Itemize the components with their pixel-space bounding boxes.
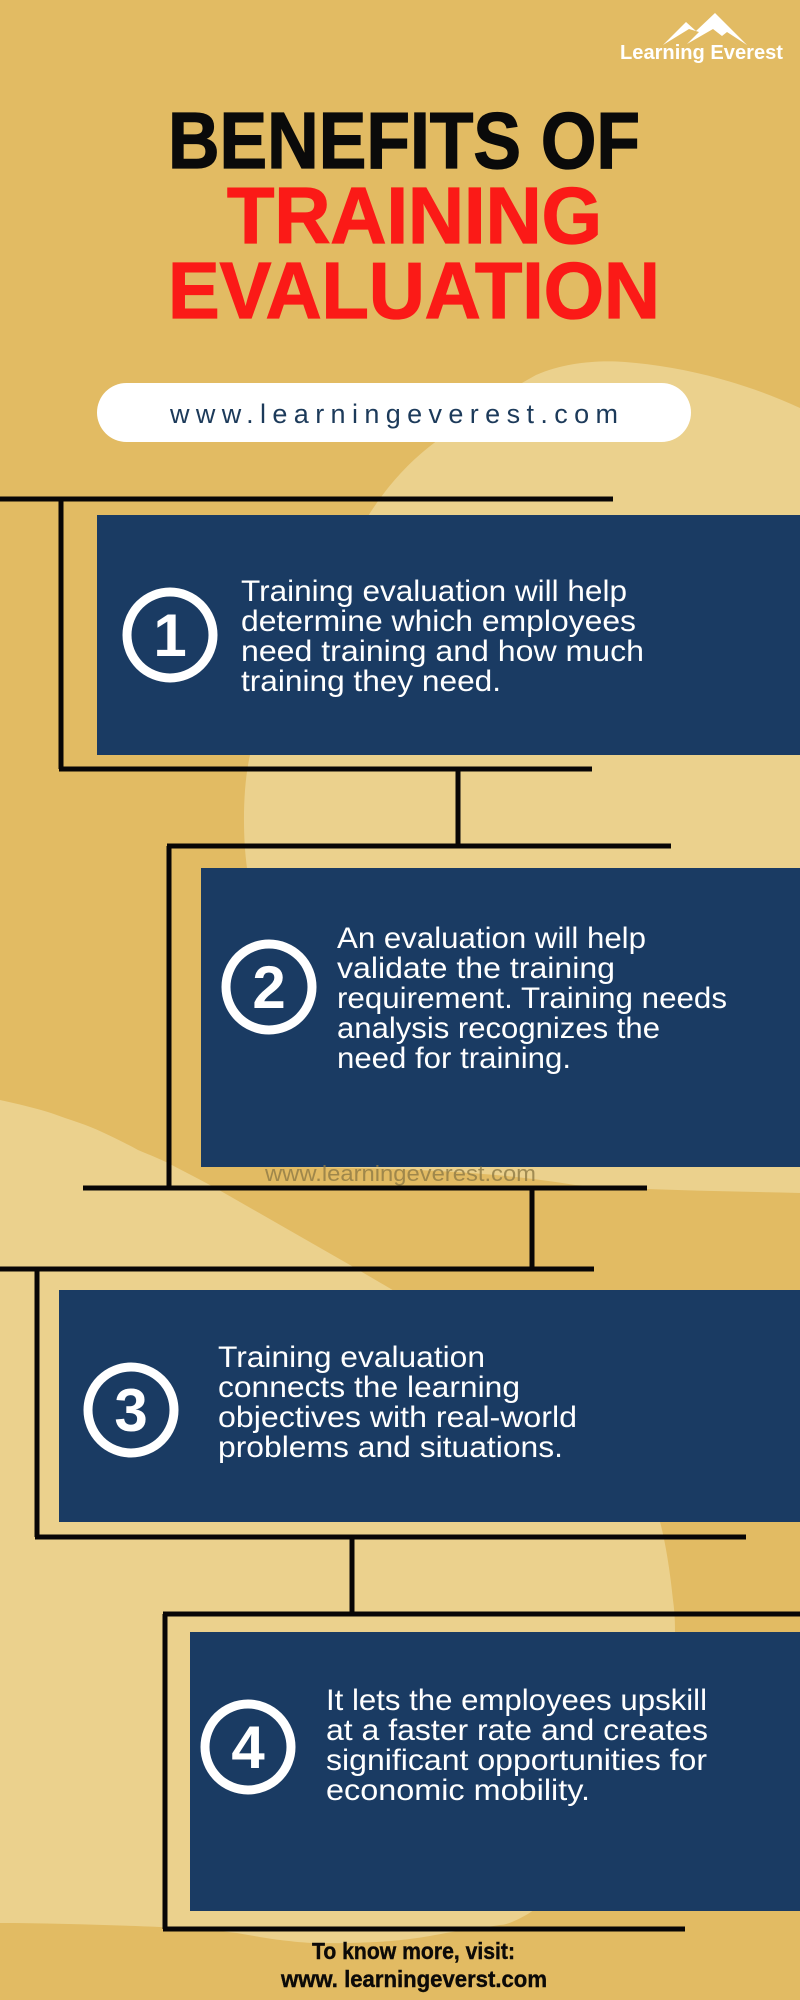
- watermark text: www.learningeverest.com: [264, 1161, 536, 1186]
- number badge 2: 2: [252, 954, 286, 1021]
- title line 3: EVALUATION: [168, 246, 660, 335]
- title line 1: BENEFITS OF: [168, 96, 640, 185]
- panel 2 text: requirement. Training needs: [337, 982, 727, 1015]
- panel 1 text: [241, 575, 644, 698]
- panel 4 text: significant opportunities for: [326, 1744, 707, 1777]
- panel 4 text: It lets the employees upskill: [326, 1684, 707, 1717]
- panel 2 text: analysis recognizes the: [337, 1012, 660, 1045]
- panel 3 text: Training evaluation: [218, 1341, 485, 1374]
- number badge 1: 1: [153, 602, 187, 669]
- website pill: [97, 383, 691, 442]
- panel 4 text: at a faster rate and creates: [326, 1714, 708, 1747]
- panel 1 text: training they need.: [241, 665, 501, 698]
- panel 2 text: [337, 922, 727, 1075]
- panel 2: [201, 868, 800, 1167]
- panel 1 text: need training and how much: [241, 635, 644, 668]
- number badge 4: 4: [231, 1714, 265, 1781]
- panel 4: [190, 1632, 800, 1911]
- number badge 3: [88, 1367, 174, 1453]
- title line 2: TRAINING: [227, 171, 602, 260]
- number badge 4: [205, 1704, 291, 1790]
- panel 2 text: validate the training: [337, 952, 615, 985]
- panel 1: [97, 515, 800, 755]
- panel 3 text: [218, 1341, 577, 1464]
- panel 4 text: [326, 1684, 708, 1807]
- panel 3 text: problems and situations.: [218, 1431, 563, 1464]
- panel 3: [59, 1290, 800, 1522]
- logo wordmark: Learning Everest: [620, 42, 783, 64]
- title: [168, 96, 660, 335]
- website pill: www.learningeverest.com: [169, 399, 618, 429]
- panel 2 text: An evaluation will help: [337, 922, 646, 955]
- number badge 1: [127, 592, 213, 678]
- footer line 2: www. learningeverst.com: [280, 1966, 547, 1992]
- logo: Learning Everest: [620, 13, 783, 64]
- number badge 3: 3: [114, 1377, 148, 1444]
- icon: mountains: [663, 13, 747, 45]
- panel 4 text: economic mobility.: [326, 1774, 590, 1807]
- footer line 1: To know more, visit:: [312, 1938, 515, 1964]
- panel 1 text: Training evaluation will help: [241, 575, 627, 608]
- panel 2 text: need for training.: [337, 1042, 571, 1075]
- number badge 2: [226, 944, 312, 1030]
- panel 3 text: objectives with real-world: [218, 1401, 577, 1434]
- connector lines: [0, 499, 800, 1929]
- footer: [280, 1938, 547, 1992]
- panel 1 text: determine which employees: [241, 605, 636, 638]
- panel 3 text: connects the learning: [218, 1371, 520, 1404]
